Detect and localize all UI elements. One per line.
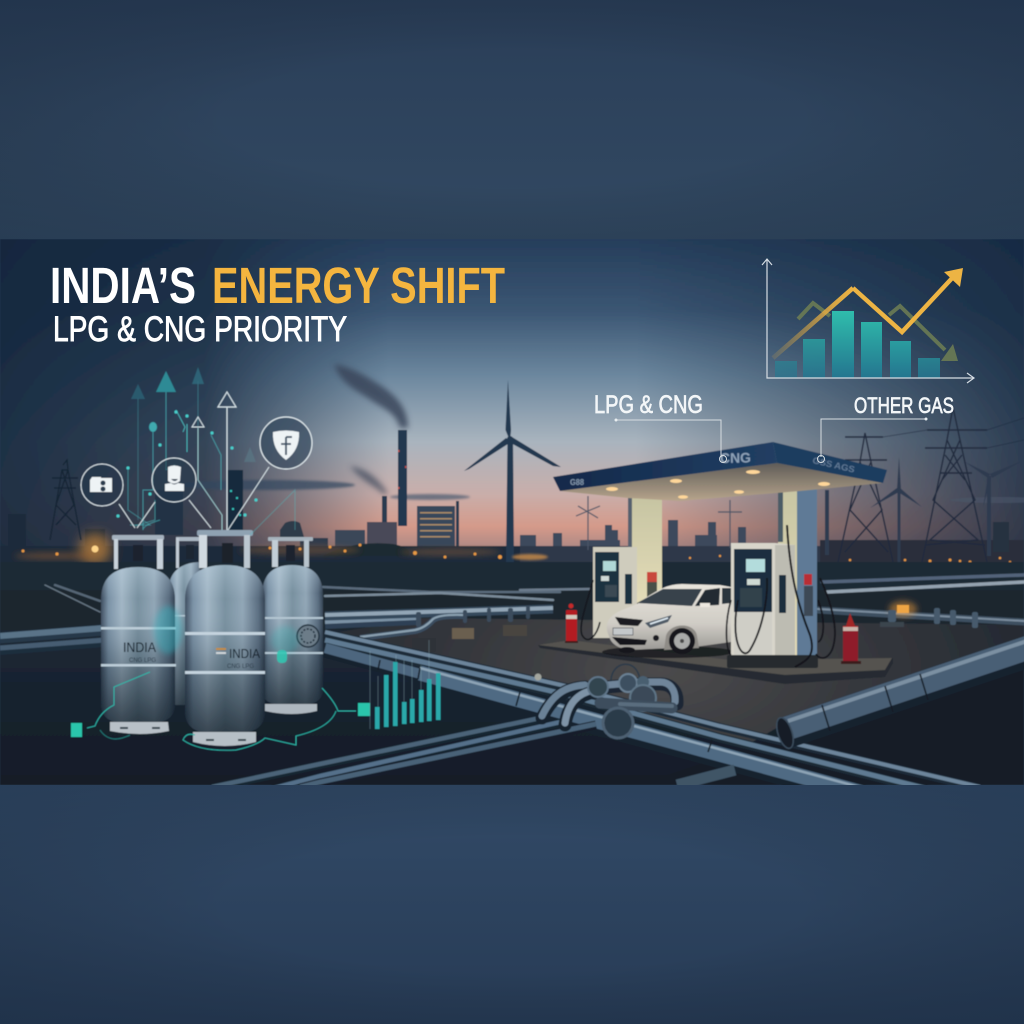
subtitle: LPG & CNG PRIORITY [53,310,347,349]
right wind turbines [824,460,1002,562]
holographic arrows [131,367,256,530]
left city skyline with lights [0,514,520,566]
canopy roof fascia [553,442,887,491]
right power pylons [842,407,1011,541]
right column [778,477,817,663]
title: INDIA’S [50,257,196,314]
centre skyline behind station [512,496,820,566]
pipe joints [378,660,928,752]
fuel station [538,442,893,684]
canopy signage: CNG [720,449,751,466]
growth chart [762,259,974,383]
holographic data dots [116,410,258,518]
top background band [0,0,1024,239]
holographic upward network [128,381,295,535]
central wind turbine [464,380,561,566]
canopy lights [606,470,830,499]
icon: shield circle [260,417,312,469]
pipe supports [451,625,527,640]
mini teal bar chart [370,640,440,729]
holographic cylinder glow [154,606,299,663]
icon: person circle [152,458,196,502]
callout: LPG & CNG: LPG & CNG [594,391,703,419]
emblem on cylinder [297,625,319,647]
right pipeline valves [888,608,978,628]
pipe manifold valve [534,664,677,738]
canopy signage [570,449,856,487]
cylinder label [124,642,156,662]
gold rising trend arrow [773,268,963,358]
title [50,257,505,314]
bottom background band [0,785,1024,1024]
illustrated scene panel [0,239,1024,803]
teal data squares [71,703,370,737]
factory chimneys and buildings [367,430,459,552]
cylinder label: INDIA [123,639,157,655]
olive falling trend arrow [798,303,958,361]
cylinder label [216,646,260,670]
gas cylinder: back right [262,521,323,714]
canopy underside [560,463,883,501]
canopy signage: G88 [570,478,585,487]
smoke plumes [334,364,408,494]
chart bars [775,311,940,378]
red safety bollards [565,604,861,664]
callout: other gas [818,393,954,462]
far background pipes [45,575,1024,622]
chart axes [762,259,974,383]
left fuel pump [581,547,657,640]
title: ENERGY SHIFT [212,257,505,314]
callout: LPG & CNG [594,391,726,462]
teal circuit traces [87,672,356,750]
mid-left pipes [0,608,553,650]
ground [0,562,1024,785]
right fuel pump [726,525,835,668]
cylinder label: INDIA [229,646,260,661]
dusk sky [0,239,1024,569]
left column [628,495,662,603]
gas cylinder: front centre [185,530,265,746]
gas cylinder: rear [168,537,202,705]
amber pipeline light [880,601,917,627]
left power pylon [50,460,81,540]
main foreground pipelines [212,632,1024,803]
cylinder label: CNG LPG [129,658,156,664]
right city strip with lights [688,522,1024,563]
gas cylinder: front left [101,535,176,734]
holographic connector lines [119,467,269,530]
cylinder label: CNG LPG [227,664,254,670]
holographic building [155,470,243,535]
station island [538,640,893,684]
pipe flanges [416,606,530,627]
icon: badge circle left [81,464,123,506]
white car [602,584,734,658]
right pipe open end [776,716,794,750]
callout: other gas: OTHER GAS [854,393,954,418]
canopy signage: GSS AGS [812,455,856,475]
